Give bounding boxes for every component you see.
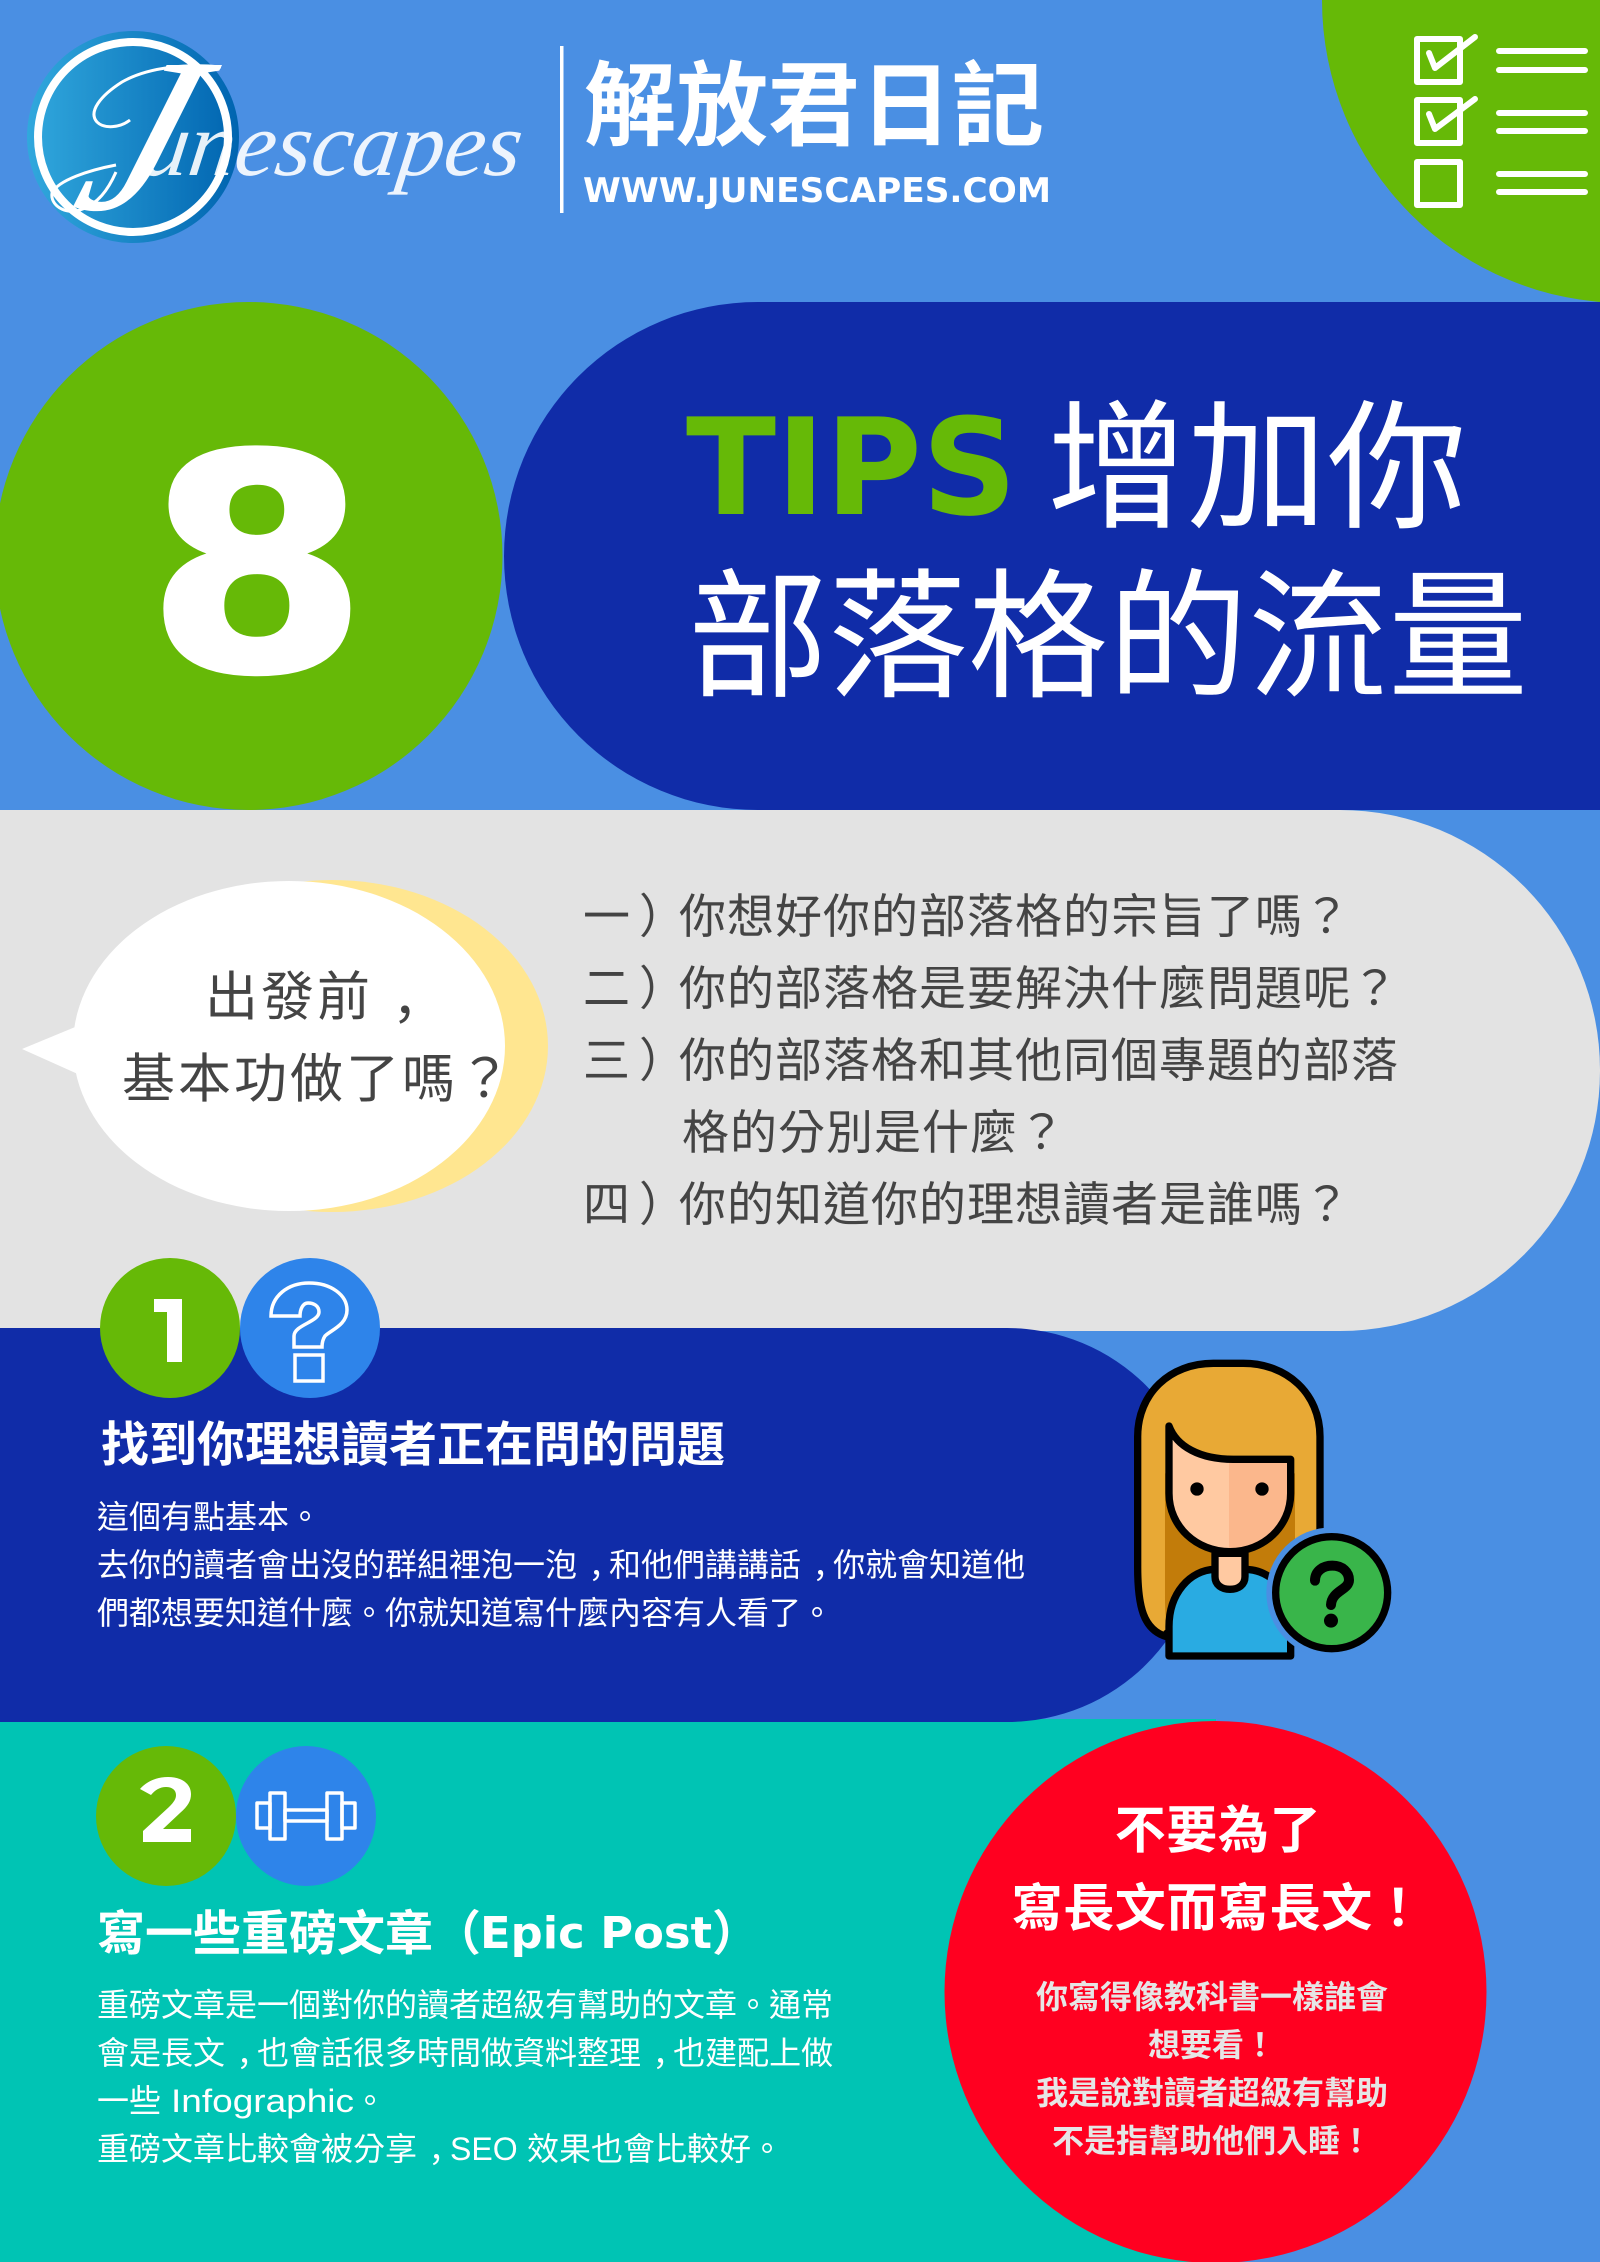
square left of grey panel (0, 810, 400, 1331)
bubble text: 基本功做了嗎？ (122, 1050, 514, 1109)
panel: tip 1 background (0, 1328, 1204, 1722)
panel: tip 2 background (0, 1719, 1216, 2262)
logo: Junescapes: J (53, 13, 239, 257)
callout heading (1012, 1802, 1424, 1937)
hero number circle (0, 302, 502, 810)
tip 2 body: 重磅文章是一個對你的讀者超級有幫助的文章。通常 (97, 1987, 833, 2023)
tip 2 heading: Epic Post (480, 1908, 712, 1959)
tip 2 body: 也會話很多時間做資料整理 (257, 2035, 641, 2071)
tip 2 heading (97, 1908, 760, 1961)
bubble text: ， (378, 987, 434, 1046)
tip 1 body: 和他們講講話 (609, 1547, 801, 1583)
callout body: 不是指幫助他們入睡！ (1052, 2123, 1372, 2159)
tip 2 body (97, 1987, 833, 2178)
callout body: 你寫得像教科書一樣誰會 (1036, 1979, 1388, 2015)
tip 1 body: 去你的讀者會出沒的群組裡泡一泡 (97, 1547, 577, 1583)
tip 2 heading: 寫一些重磅文章（ (97, 1908, 481, 1961)
corner circle with checklist icon (1322, 0, 1600, 303)
tip 1 body: 你就會知道他 (833, 1547, 1025, 1583)
tip 2 body: 一些 (97, 2083, 161, 2119)
tip 2 body: ， (228, 2046, 260, 2082)
panel: intro checklist (grey) (0, 810, 1600, 1331)
brand name: 解放君日記 (584, 56, 1044, 158)
tip 1 body: ， (804, 1558, 836, 1594)
logo: Junescapes (27, 13, 529, 257)
callout heading: 不要為了 (1115, 1802, 1321, 1859)
logo divider (560, 46, 564, 213)
callout heading: 寫長文而寫長文！ (1012, 1880, 1424, 1937)
tip 2 number badge (96, 1746, 236, 1886)
tip 2 body: ， (420, 2142, 452, 2178)
logo: Junescapes: unescapes (137, 93, 529, 195)
tip 2 body: 。 (354, 2083, 386, 2119)
tip 2 body: 會是長文 (97, 2035, 225, 2071)
questions list (583, 890, 1399, 1231)
questions list: 四）你的知道你的理想讀者是誰嗎？ (583, 1178, 1351, 1231)
questions list: 格的分別是什麼？ (682, 1106, 1066, 1159)
tip 1 body (97, 1499, 1025, 1631)
icon: woman with question bubble (1138, 1363, 1397, 1658)
title line 1: TIPS (686, 390, 1017, 546)
tip 2 body: 重磅文章比較會被分享 (97, 2131, 417, 2167)
icon: checklist (1417, 37, 1585, 205)
tip 1 body: 這個有點基本。 (97, 1499, 321, 1535)
tip 2 body: ， (644, 2046, 676, 2082)
bubble text (122, 968, 514, 1109)
website url: WWW.JUNESCAPES.COM (583, 171, 1051, 211)
tip 1 number badge (100, 1258, 240, 1398)
panel: hero title background (504, 302, 1600, 810)
title line 2: 部落格的流量 (688, 559, 1528, 716)
questions list: 二）你的部落格是要解決什麼問題呢？ (583, 962, 1399, 1015)
tip 1 body: ， (580, 1558, 612, 1594)
callout body: 我是說對讀者超級有幫助 (1036, 2075, 1388, 2111)
bubble text: 出發前 (205, 968, 373, 1027)
questions list: 一）你想好你的部落格的宗旨了嗎？ (583, 890, 1351, 943)
speech bubble (22, 880, 548, 1212)
tip 2 body: 也建配上做 (673, 2035, 833, 2071)
callout body: 想要看！ (1148, 2027, 1276, 2063)
tip 1 body: 們都想要知道什麼。你就知道寫什麼內容有人看了。 (97, 1595, 833, 1631)
tip 2 body: 效果也會比較好。 (527, 2131, 783, 2167)
questions list: 三）你的部落格和其他同個專題的部落 (583, 1034, 1399, 1087)
tip 2 heading: ） (712, 1908, 760, 1961)
tip 2 body: Infographic (171, 2083, 354, 2119)
icon: question mark (240, 1258, 380, 1398)
icon: dumbbell (236, 1746, 376, 1886)
hero number circle: 8 (146, 392, 368, 741)
title line 1 (686, 390, 1467, 547)
tip 2 body: SEO (450, 2131, 518, 2167)
callout: red warning circle (944, 1721, 1486, 2262)
tip 1 heading: 找到你理想讀者正在問的問題 (101, 1419, 725, 1472)
title line 1: 增加你 (1047, 390, 1467, 547)
callout body (1036, 1979, 1388, 2159)
